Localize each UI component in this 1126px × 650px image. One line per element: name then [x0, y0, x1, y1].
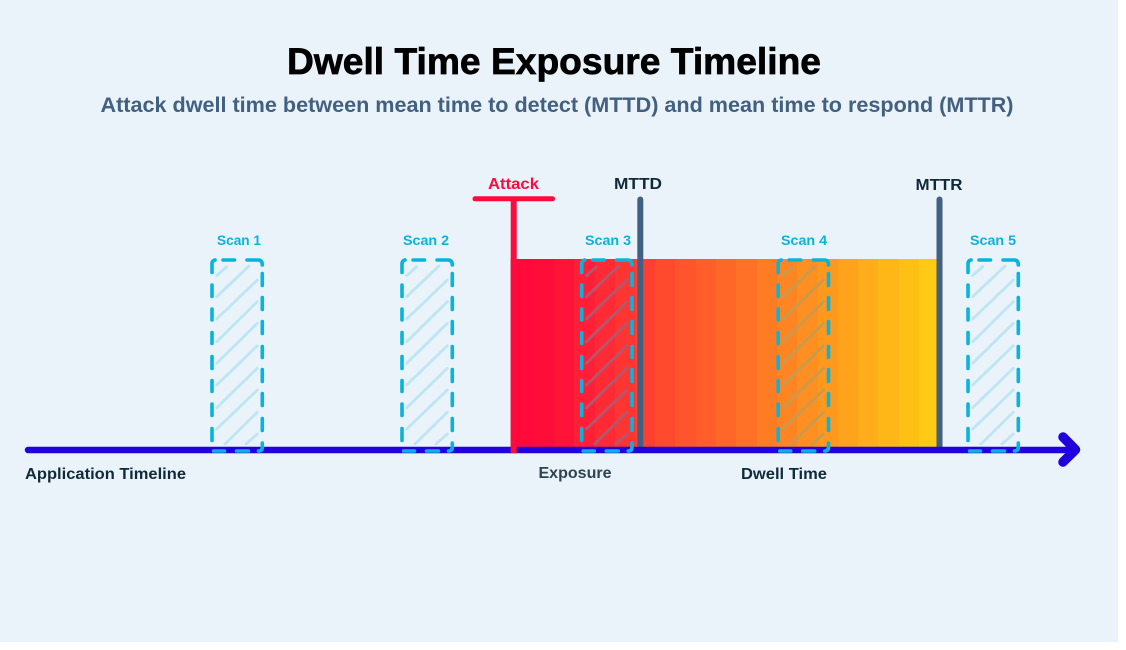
scan 3 window: [582, 260, 632, 451]
application timeline label: Application Timeline: [25, 466, 186, 483]
scan 1 label: Scan 1: [217, 232, 261, 248]
title: Dwell Time Exposure Timeline: [287, 41, 821, 82]
exposure label: Exposure: [538, 465, 612, 482]
scan 2 window: [402, 260, 452, 451]
MTTD label: MTTD: [614, 176, 662, 193]
MTTD marker: [637, 200, 643, 448]
scan 4 label: Scan 4: [781, 232, 827, 248]
scan 5 window: [968, 260, 1018, 451]
application timeline arrow: [28, 437, 1076, 462]
exposure gradient area: [511, 259, 937, 448]
attack marker: [475, 199, 552, 453]
subtitle: Attack dwell time between mean time to detect (MTTD) and mean time to respond (MTTR): [100, 94, 1014, 117]
scan 1 window: [212, 260, 262, 451]
scan 4 window: [778, 260, 828, 451]
MTTR marker: [936, 200, 942, 448]
scan 2 label: Scan 2: [403, 232, 449, 248]
attack label: Attack: [488, 176, 539, 193]
MTTR label: MTTR: [916, 177, 962, 194]
dwell time label: Dwell Time: [741, 466, 827, 483]
scan 3 label: Scan 3: [585, 232, 631, 248]
scan 5 label: Scan 5: [970, 232, 1016, 248]
